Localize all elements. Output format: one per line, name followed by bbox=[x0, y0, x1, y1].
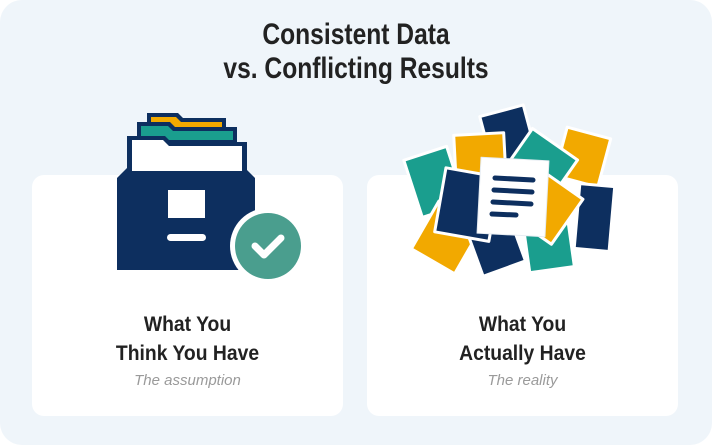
icon: check badge bbox=[230, 208, 306, 284]
label: right heading: Actually Have bbox=[459, 342, 586, 365]
label: left subtitle: The assumption bbox=[134, 372, 241, 389]
label: right heading: What You bbox=[479, 313, 566, 336]
icon: scattered documents bbox=[404, 105, 615, 276]
label: left heading: Think You Have bbox=[116, 342, 259, 365]
icon: document lines bbox=[492, 178, 533, 215]
title bbox=[223, 18, 489, 85]
title: vs. Conflicting Results bbox=[223, 52, 489, 85]
title: Consistent Data bbox=[262, 18, 450, 51]
label: left heading bbox=[116, 313, 259, 365]
panel: right card bbox=[367, 175, 678, 416]
panel: left card bbox=[32, 175, 343, 416]
label: right heading bbox=[459, 313, 586, 365]
label: left heading: What You bbox=[144, 313, 231, 336]
label: right subtitle: The reality bbox=[487, 372, 558, 389]
